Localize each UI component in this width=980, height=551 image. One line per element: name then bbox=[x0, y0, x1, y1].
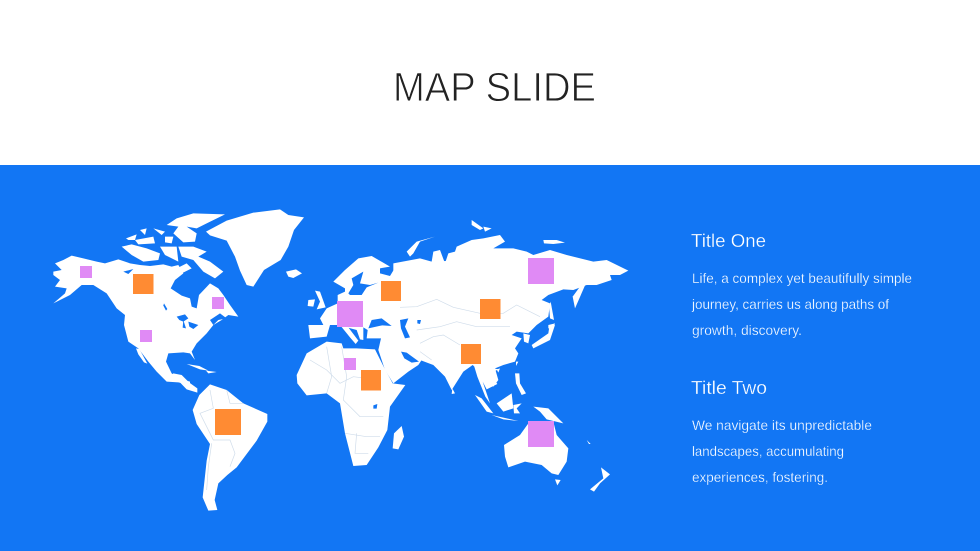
map: North America bbox=[53, 213, 238, 385]
landmass: Greenland bbox=[206, 209, 304, 287]
water: Aral Sea bbox=[417, 320, 421, 324]
text block: title two bbox=[691, 377, 872, 485]
borders: South America bbox=[200, 390, 243, 490]
landmass: Novaya Zemlya bbox=[407, 237, 435, 257]
marker: Central Africa bbox=[361, 370, 381, 390]
landmass: Sakhalin bbox=[549, 302, 554, 320]
landmass: Arctic islands bbox=[472, 220, 483, 230]
text block: title one bbox=[691, 230, 912, 338]
map: Asia bbox=[393, 220, 628, 390]
water: Persian Gulf bbox=[401, 352, 419, 363]
title: MAP SLIDE bbox=[393, 64, 596, 110]
landmass: South America bbox=[193, 384, 267, 511]
landmass: North America mainland bbox=[53, 256, 238, 385]
markers: map squares bbox=[80, 258, 554, 447]
map: Europe and Middle East bbox=[308, 256, 475, 383]
landmass: New Zealand bbox=[590, 467, 610, 492]
landmass: Borneo bbox=[497, 393, 513, 412]
heading: Title Two: Title Two bbox=[691, 377, 767, 398]
marker: Canada bbox=[133, 274, 154, 294]
marker: Russia bbox=[381, 281, 401, 301]
body text: Title One: Life, a complex yet beautifully simple bbox=[692, 270, 912, 286]
map: inland seas bbox=[348, 272, 421, 363]
landmass: Kamchatka bbox=[573, 282, 587, 308]
marker: China bbox=[461, 344, 481, 364]
body text: Title Two: landscapes, accumulating bbox=[692, 443, 844, 459]
map: Central America, South America and Greenland bbox=[166, 209, 304, 511]
marker: North Africa bbox=[344, 358, 356, 370]
water: Great Lakes bbox=[177, 314, 188, 322]
map: Africa bbox=[297, 342, 405, 466]
map: Southeast Asia and Oceania bbox=[452, 362, 610, 492]
landmass: Sumatra bbox=[475, 395, 493, 413]
borders: Africa bbox=[310, 347, 383, 453]
landmass: Central America bbox=[166, 373, 197, 393]
landmass: Philippines bbox=[515, 373, 526, 395]
landmass: Baja California bbox=[136, 348, 147, 364]
world map bbox=[53, 209, 628, 511]
marker: United States bbox=[140, 330, 152, 342]
water: Lake Victoria bbox=[373, 404, 377, 409]
landmass: Sri Lanka bbox=[452, 388, 455, 394]
landmass: Africa bbox=[297, 342, 405, 466]
landmass: Arctic islands bbox=[122, 244, 160, 262]
body text: Title Two bbox=[692, 417, 872, 485]
marker: Alaska bbox=[80, 266, 92, 278]
marker: Brazil bbox=[215, 409, 241, 435]
landmass: Japan bbox=[532, 325, 555, 348]
marker: Quebec bbox=[212, 297, 224, 309]
landmass: Tasmania bbox=[555, 479, 561, 485]
landmass: Iceland bbox=[286, 269, 302, 278]
landmass: Europe and Middle East bbox=[308, 256, 475, 383]
body text: Title One: growth, discovery. bbox=[692, 322, 802, 338]
marker: Australia bbox=[528, 421, 554, 447]
water: Caspian Sea bbox=[400, 318, 410, 338]
body text: Title Two: We navigate its unpredictable bbox=[692, 417, 872, 433]
water: Black Sea bbox=[368, 318, 392, 328]
heading: Title One: Title One bbox=[691, 230, 766, 251]
body text: Title One bbox=[691, 270, 912, 338]
landmass: Indochina bbox=[473, 363, 498, 403]
landmass: Australia bbox=[504, 422, 568, 475]
landmass: Asia mainland bbox=[393, 235, 628, 390]
landmass: Caribbean islands bbox=[187, 364, 208, 371]
landmass: New Guinea bbox=[533, 407, 563, 423]
body text: Title One: journey, carries us along paths of bbox=[691, 296, 889, 312]
landmass: Taiwan and Hainan bbox=[516, 362, 518, 366]
landmass: Korea bbox=[523, 333, 530, 343]
body text: Title Two: experiences, fostering. bbox=[692, 469, 828, 485]
landmass: Britain and Ireland bbox=[315, 291, 326, 309]
landmass: Java bbox=[492, 415, 518, 421]
landmass: Sulawesi bbox=[513, 403, 522, 413]
water: Baltic Sea bbox=[348, 272, 378, 295]
landmass: Madagascar bbox=[393, 426, 404, 449]
panel: blue background bbox=[0, 165, 980, 551]
marker: Mongolia bbox=[480, 299, 500, 319]
borders: Asia bbox=[400, 299, 540, 360]
landmass: Italy bbox=[340, 325, 358, 344]
marker: Siberia bbox=[528, 258, 554, 284]
marker: Central Europe bbox=[337, 301, 363, 327]
